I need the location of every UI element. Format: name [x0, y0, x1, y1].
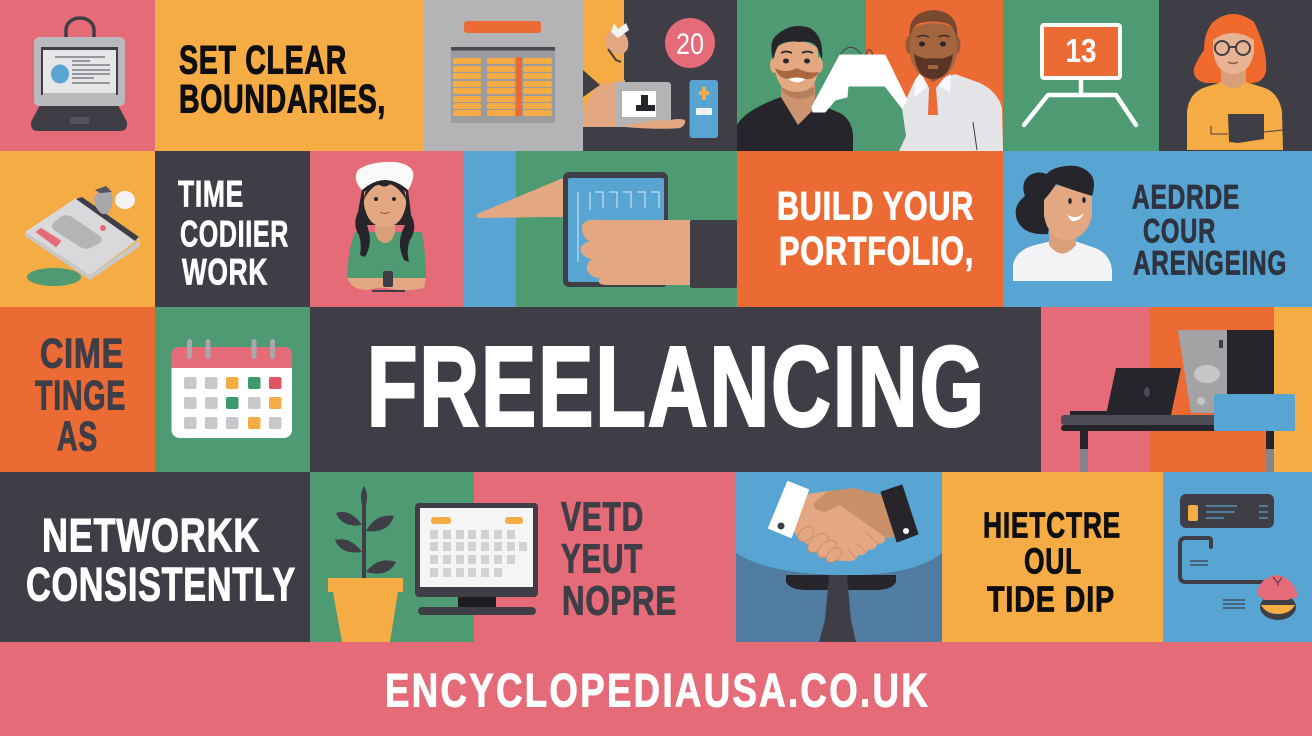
- text block: time codier work: WORK: [182, 252, 268, 292]
- text block: aedrde cour arengeing: AEDRDE: [1132, 178, 1240, 216]
- icon: padlock laptop: [31, 18, 127, 131]
- text block: vetd yeut nopre: VETD: [561, 494, 644, 540]
- text block: networkk consistently: NETWORKK: [42, 508, 260, 562]
- icon: number badge 20: [665, 18, 715, 68]
- text block: hietctre oul tide dip: OUL: [1024, 540, 1082, 582]
- illustration: bearded man: [737, 26, 853, 151]
- heading: set clear boundaries: BOUNDARIES,: [179, 78, 386, 122]
- icon: open book with magnifier: [25, 186, 140, 286]
- text block: networkk consistently: [26, 508, 296, 610]
- illustration: desk with laptop: [1061, 330, 1295, 472]
- heading: build your portfolio: BUILD YOUR: [777, 184, 974, 228]
- icon: number badge 20: 20: [676, 28, 704, 61]
- icon: white headset shape: [812, 47, 907, 112]
- text block: time codier work: [178, 174, 289, 292]
- heading: set clear boundaries: [179, 38, 386, 122]
- illustration: hand using tablet: [476, 172, 737, 288]
- icon: schedule table: [451, 21, 555, 123]
- heading: build your portfolio: [777, 184, 974, 274]
- text block: time codier work: TIME: [178, 174, 244, 214]
- text block: hietctre oul tide dip: HIETCTRE: [983, 504, 1121, 546]
- text block: cime tinge as: TINGE: [35, 372, 126, 418]
- heading: set clear boundaries: SET CLEAR: [179, 38, 347, 82]
- text block: cime tinge as: [35, 330, 126, 460]
- text block: cime tinge as: CIME: [40, 330, 124, 376]
- panel: row 4 tiles: [0, 472, 1312, 642]
- icon: monitor with stand: [1024, 25, 1136, 125]
- icon: wall calendar: [172, 339, 292, 438]
- text block: cime tinge as: AS: [57, 412, 98, 460]
- illustration: handshake over table: [736, 482, 942, 642]
- icon: blue phone: [690, 80, 718, 138]
- text block: vetd yeut nopre: YEUT: [561, 536, 643, 582]
- text block: aedrde cour arengeing: COUR: [1143, 212, 1216, 250]
- text block: networkk consistently: CONSISTENTLY: [26, 558, 296, 610]
- panel: row 1 tiles: [0, 0, 1312, 151]
- heading: build your portfolio: PORTFOLIO,: [779, 230, 974, 274]
- title: FREELANCING: [367, 324, 986, 450]
- icon: potted plant: [328, 486, 403, 642]
- text block: vetd yeut nopre: [561, 494, 677, 624]
- icon: hand holding device: [583, 23, 685, 151]
- icon: desktop monitor calendar: [415, 503, 538, 615]
- text block: hietctre oul tide dip: [983, 504, 1121, 620]
- text block: time codier work: CODIIER: [180, 214, 289, 254]
- illustration: smiling woman portrait: [1013, 166, 1112, 281]
- text block: hietctre oul tide dip: TIDE DIP: [987, 578, 1115, 620]
- illustration: woman with glasses: [1187, 14, 1283, 150]
- illustration: man with orange tie: [866, 10, 1003, 151]
- text block: aedrde cour arengeing: [1132, 178, 1287, 282]
- icon: monitor with stand: 13: [1066, 32, 1096, 69]
- panel: footer band: [0, 642, 1312, 736]
- panel: row 3 tiles: [0, 307, 1312, 472]
- panel: row 2 tiles: [0, 151, 1312, 307]
- footer url: ENCYCLOPEDIAUSA.CO.UK: [385, 664, 930, 716]
- icon: card, bracket and badge: [1180, 494, 1298, 620]
- illustration: woman in white cap: [347, 162, 426, 292]
- text block: vetd yeut nopre: NOPRE: [562, 578, 677, 624]
